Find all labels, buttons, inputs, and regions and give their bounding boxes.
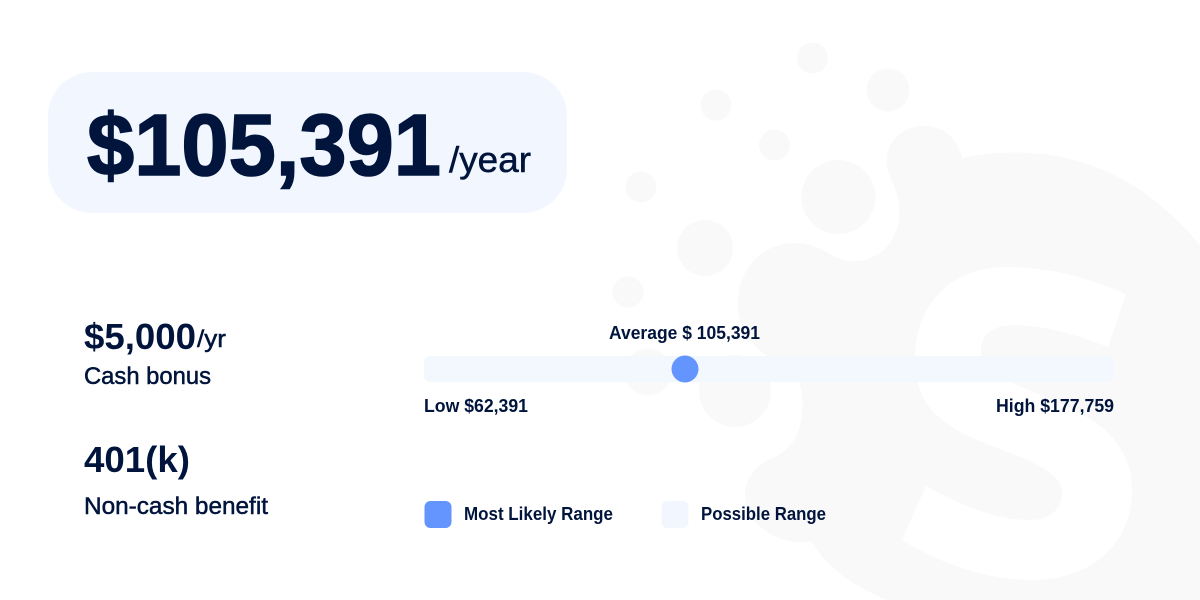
pill background [48,72,567,213]
legend [424,501,826,528]
legend label: most likely range: Most Likely Range [464,504,613,524]
legend swatch: most likely range [424,501,452,528]
headline salary pill [48,72,567,213]
low label: Low $62,391 [424,396,528,416]
bonus amount: $5,000 [84,316,196,357]
high label: High $177,759 [996,396,1114,416]
watermark: blob with letter S [738,126,1200,600]
401k heading: 401(k) [84,439,190,480]
401k block [84,439,268,520]
background logo watermark [612,42,1200,600]
bonus label: Cash bonus [84,363,211,390]
bonus unit: /yr [197,326,226,353]
401k label: Non-cash benefit [84,493,268,520]
legend label: possible range: Possible Range [701,504,826,524]
per year unit: /year [449,139,531,180]
cash bonus block [84,316,226,390]
salary range chart [424,323,1114,416]
watermark: droplets [612,42,910,427]
possible range bar [424,356,1114,382]
salary amount: $105,391 [87,97,441,194]
average label: Average $ 105,391 [609,323,760,343]
average marker [672,356,698,382]
legend swatch: possible range [662,501,688,528]
